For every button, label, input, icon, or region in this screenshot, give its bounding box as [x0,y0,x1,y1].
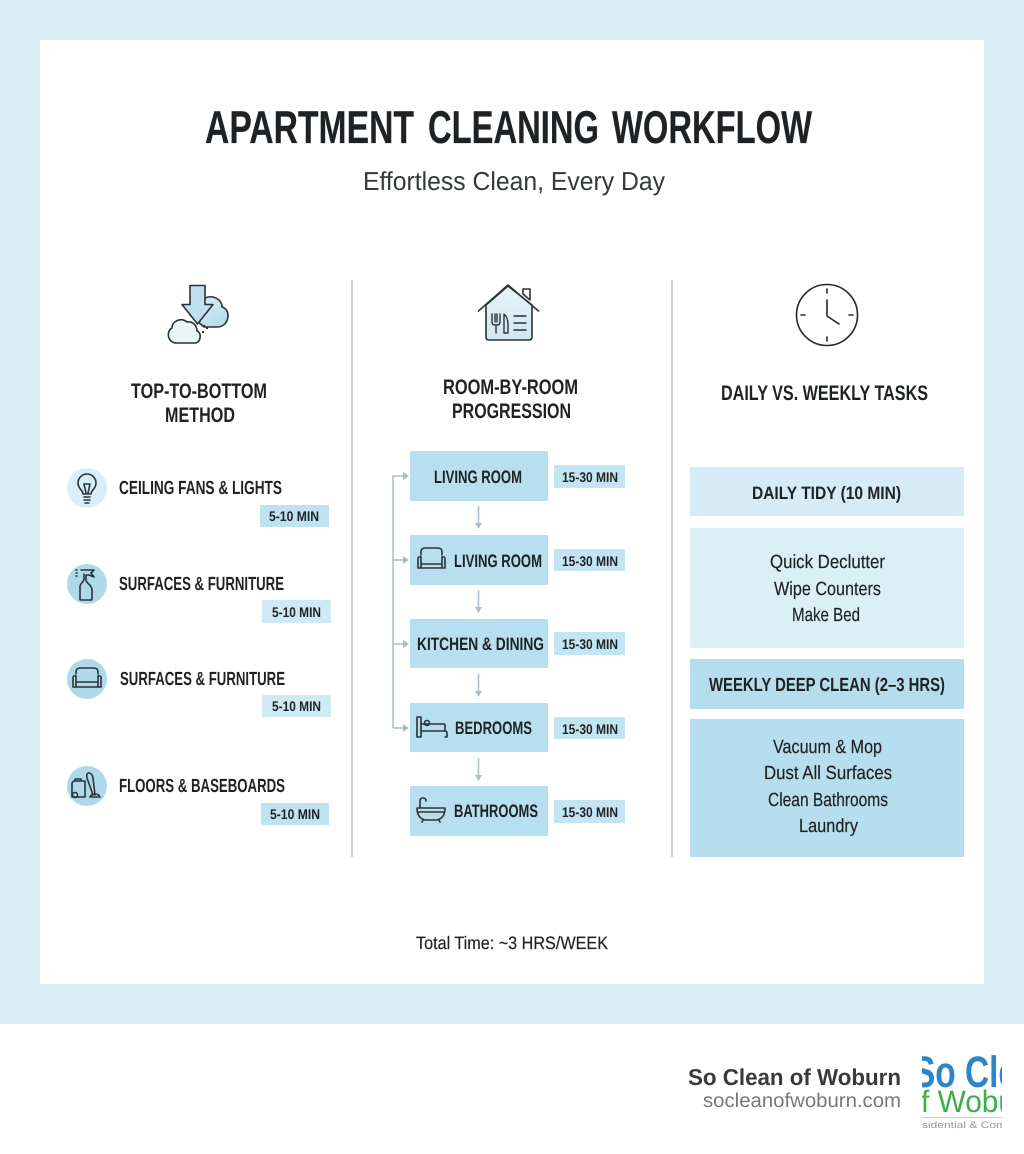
weekly task list: Vacuum & Mop [773,737,882,758]
item: ceiling fans and lights: 5-10 MIN [269,508,319,524]
item: floors and baseboards: FLOORS & BASEBOARDS [119,776,285,797]
weekly task list: Dust All Surfaces [764,763,892,784]
step: bedrooms [410,703,625,752]
footer brand: socleanofwoburn.com [703,1090,901,1112]
step: living room: LIVING ROOM [434,467,522,487]
title: CLEANING [428,101,599,153]
step: living room with sofa [410,535,625,585]
panel: room-by-room progression [393,285,625,836]
weekly deep clean header [690,659,964,709]
heading: TOP-TO-BOTTOM [131,380,267,403]
heading: PROGRESSION [452,400,571,423]
daily tidy header: DAILY TIDY (10 MIN) [752,483,901,503]
title [205,101,812,153]
daily task list: Make Bed [792,605,860,626]
item: surfaces and furniture, sofa [67,659,331,717]
daily task list: Wipe Counters [774,579,881,600]
icon: house [478,285,538,340]
footer logo [922,1055,1002,1128]
item: ceiling fans and lights [67,468,329,527]
heading: ROOM-BY-ROOM [443,376,578,399]
item: surfaces and furniture, sofa: 5-10 MIN [272,698,321,714]
column dividers [352,280,672,857]
item: surfaces and furniture, spray: 5-10 MIN [272,604,321,620]
weekly task list [690,719,964,857]
weekly task list: Clean Bathrooms [768,790,888,811]
item: surfaces and furniture, sofa: SURFACES & FURNITURE [120,669,285,690]
panel: daily vs weekly tasks [690,284,964,857]
footer brand [688,1064,901,1112]
step: living room with sofa: 15-30 MIN [562,553,618,569]
icon: arrow and clouds [168,286,228,343]
footer logo: f Wobu [921,1084,1015,1119]
footer band [0,1024,1024,1154]
footer logo: sidential & Com [922,1120,1006,1131]
step: kitchen and dining: KITCHEN & DINING [417,634,544,654]
title: WORKFLOW [612,101,812,153]
step: bedrooms: BEDROOMS [455,718,532,738]
heading [443,376,578,423]
item: ceiling fans and lights: CEILING FANS & LIGHTS [119,478,282,499]
footer brand: So Clean of Woburn [688,1064,901,1090]
item: surfaces and furniture, spray: SURFACES & FURNITURE [119,574,284,595]
weekly task list: Laundry [799,816,858,837]
total time: Total Time: ~3 HRS/WEEK [416,933,608,953]
heading [131,380,267,427]
main white panel [40,40,984,984]
step: bathrooms [410,786,625,836]
step: living room [410,451,625,501]
step: kitchen and dining [410,619,625,668]
heading: METHOD [165,404,235,427]
daily task list: Quick Declutter [770,552,886,573]
step: living room with sofa: LIVING ROOM [454,551,542,571]
step: living room: 15-30 MIN [562,469,618,485]
step: kitchen and dining: 15-30 MIN [562,636,618,652]
subtitle: Effortless Clean, Every Day [363,166,665,196]
item: floors and baseboards [67,766,329,825]
daily task list [690,528,964,648]
panel: top-to-bottom method [67,286,331,825]
weekly deep clean header: WEEKLY DEEP CLEAN (2–3 HRS) [709,675,945,696]
step: bathrooms: BATHROOMS [454,801,538,821]
item: surfaces and furniture, spray [67,564,331,623]
heading: DAILY VS. WEEKLY TASKS [721,382,928,405]
step: bedrooms: 15-30 MIN [562,721,618,737]
step: bathrooms: 15-30 MIN [562,804,618,820]
item: floors and baseboards: 5-10 MIN [270,806,320,822]
title: APARTMENT [205,101,414,153]
daily tidy header [690,467,964,516]
icon: clock [796,284,858,346]
connector arrows [393,472,482,781]
